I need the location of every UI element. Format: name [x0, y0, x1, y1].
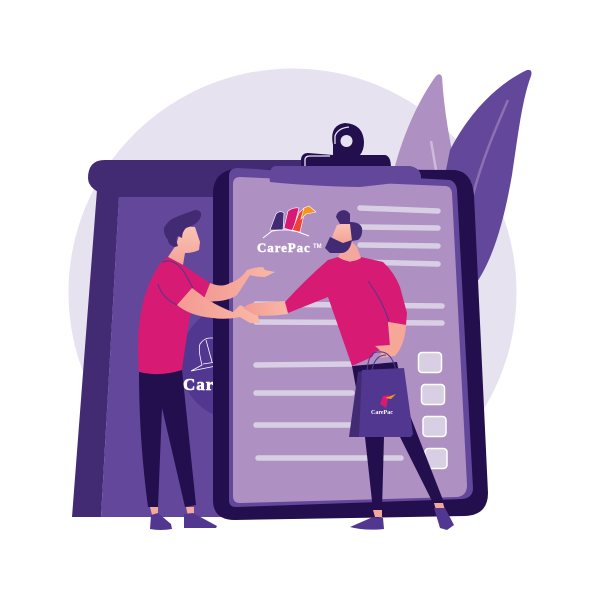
right man pants	[352, 362, 443, 510]
right man hair	[336, 210, 362, 241]
back board	[72, 160, 305, 517]
left man pants	[139, 370, 196, 507]
clipboard	[213, 166, 488, 520]
back logo	[183, 338, 252, 394]
main logo: CarePac	[257, 240, 311, 255]
main logo: TM	[313, 244, 322, 250]
right man hand	[243, 301, 288, 316]
left man far arm	[203, 267, 275, 301]
clip	[301, 123, 391, 168]
bag logo: CarePac	[371, 410, 393, 416]
left man near arm	[177, 288, 260, 323]
main logo	[257, 206, 322, 255]
back logo: CarePac	[183, 375, 252, 394]
right man face	[332, 222, 353, 244]
left man shirt	[138, 257, 210, 374]
right man ankles	[373, 503, 445, 517]
left man neck and face	[168, 226, 200, 265]
checkboxes	[418, 352, 447, 468]
checklist lines	[256, 208, 442, 458]
left man	[138, 210, 275, 530]
right man shoes	[350, 508, 454, 530]
left man shoes	[150, 513, 217, 530]
right man neck	[338, 240, 361, 261]
left man hair	[164, 210, 201, 247]
clipboard top tab	[270, 166, 421, 187]
background circle	[68, 68, 516, 516]
right man beard	[325, 237, 352, 253]
right man shirt	[285, 257, 407, 366]
right man hip arm	[375, 322, 406, 358]
right man	[243, 210, 454, 530]
shopping bag	[349, 352, 413, 437]
left man ankles	[150, 507, 194, 516]
leaves	[394, 70, 532, 282]
